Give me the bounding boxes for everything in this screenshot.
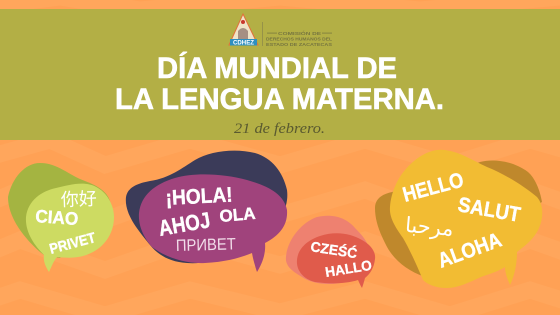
greetings: HALLO	[324, 257, 373, 280]
greetings: 你好	[60, 189, 97, 210]
speech bubble: purple	[126, 151, 287, 272]
greetings: OLA	[219, 204, 256, 226]
greetings: HELLO	[400, 169, 466, 207]
logo: CDHEZ	[229, 14, 332, 47]
greetings	[35, 189, 98, 258]
greetings: CZEŚĆ	[310, 237, 359, 261]
logo text: DERECHOS HUMANOS DEL	[266, 36, 332, 42]
greetings: ALOHA	[435, 229, 505, 273]
title: DÍA MUNDIAL DE	[157, 51, 397, 85]
logo text: ESTADO DE ZACATECAS	[266, 42, 332, 47]
greetings	[400, 169, 522, 273]
greetings: ПРИВЕТ	[176, 235, 236, 255]
speech bubble: green	[8, 163, 114, 272]
speech bubble: red	[286, 216, 375, 288]
logo text	[266, 31, 332, 47]
title	[115, 51, 444, 116]
title band	[0, 9, 560, 140]
speech bubble: yellow	[375, 150, 542, 288]
greetings: PRIVET	[48, 230, 98, 258]
greetings: AHOJ	[157, 207, 212, 241]
icon: triangle emblem: CDHEZ	[233, 40, 254, 46]
greetings: SALUT	[456, 193, 522, 227]
greetings: مرحبا	[404, 213, 455, 241]
date subtitle: 21 de febrero.	[234, 121, 325, 137]
title: LA LENGUA MATERNA.	[115, 83, 444, 116]
greetings: CIAO	[35, 206, 79, 229]
greetings	[157, 184, 256, 255]
greetings: ¡HOLA!	[165, 184, 233, 210]
greetings	[310, 237, 373, 280]
logo text: COMISIÓN DE	[278, 31, 321, 36]
